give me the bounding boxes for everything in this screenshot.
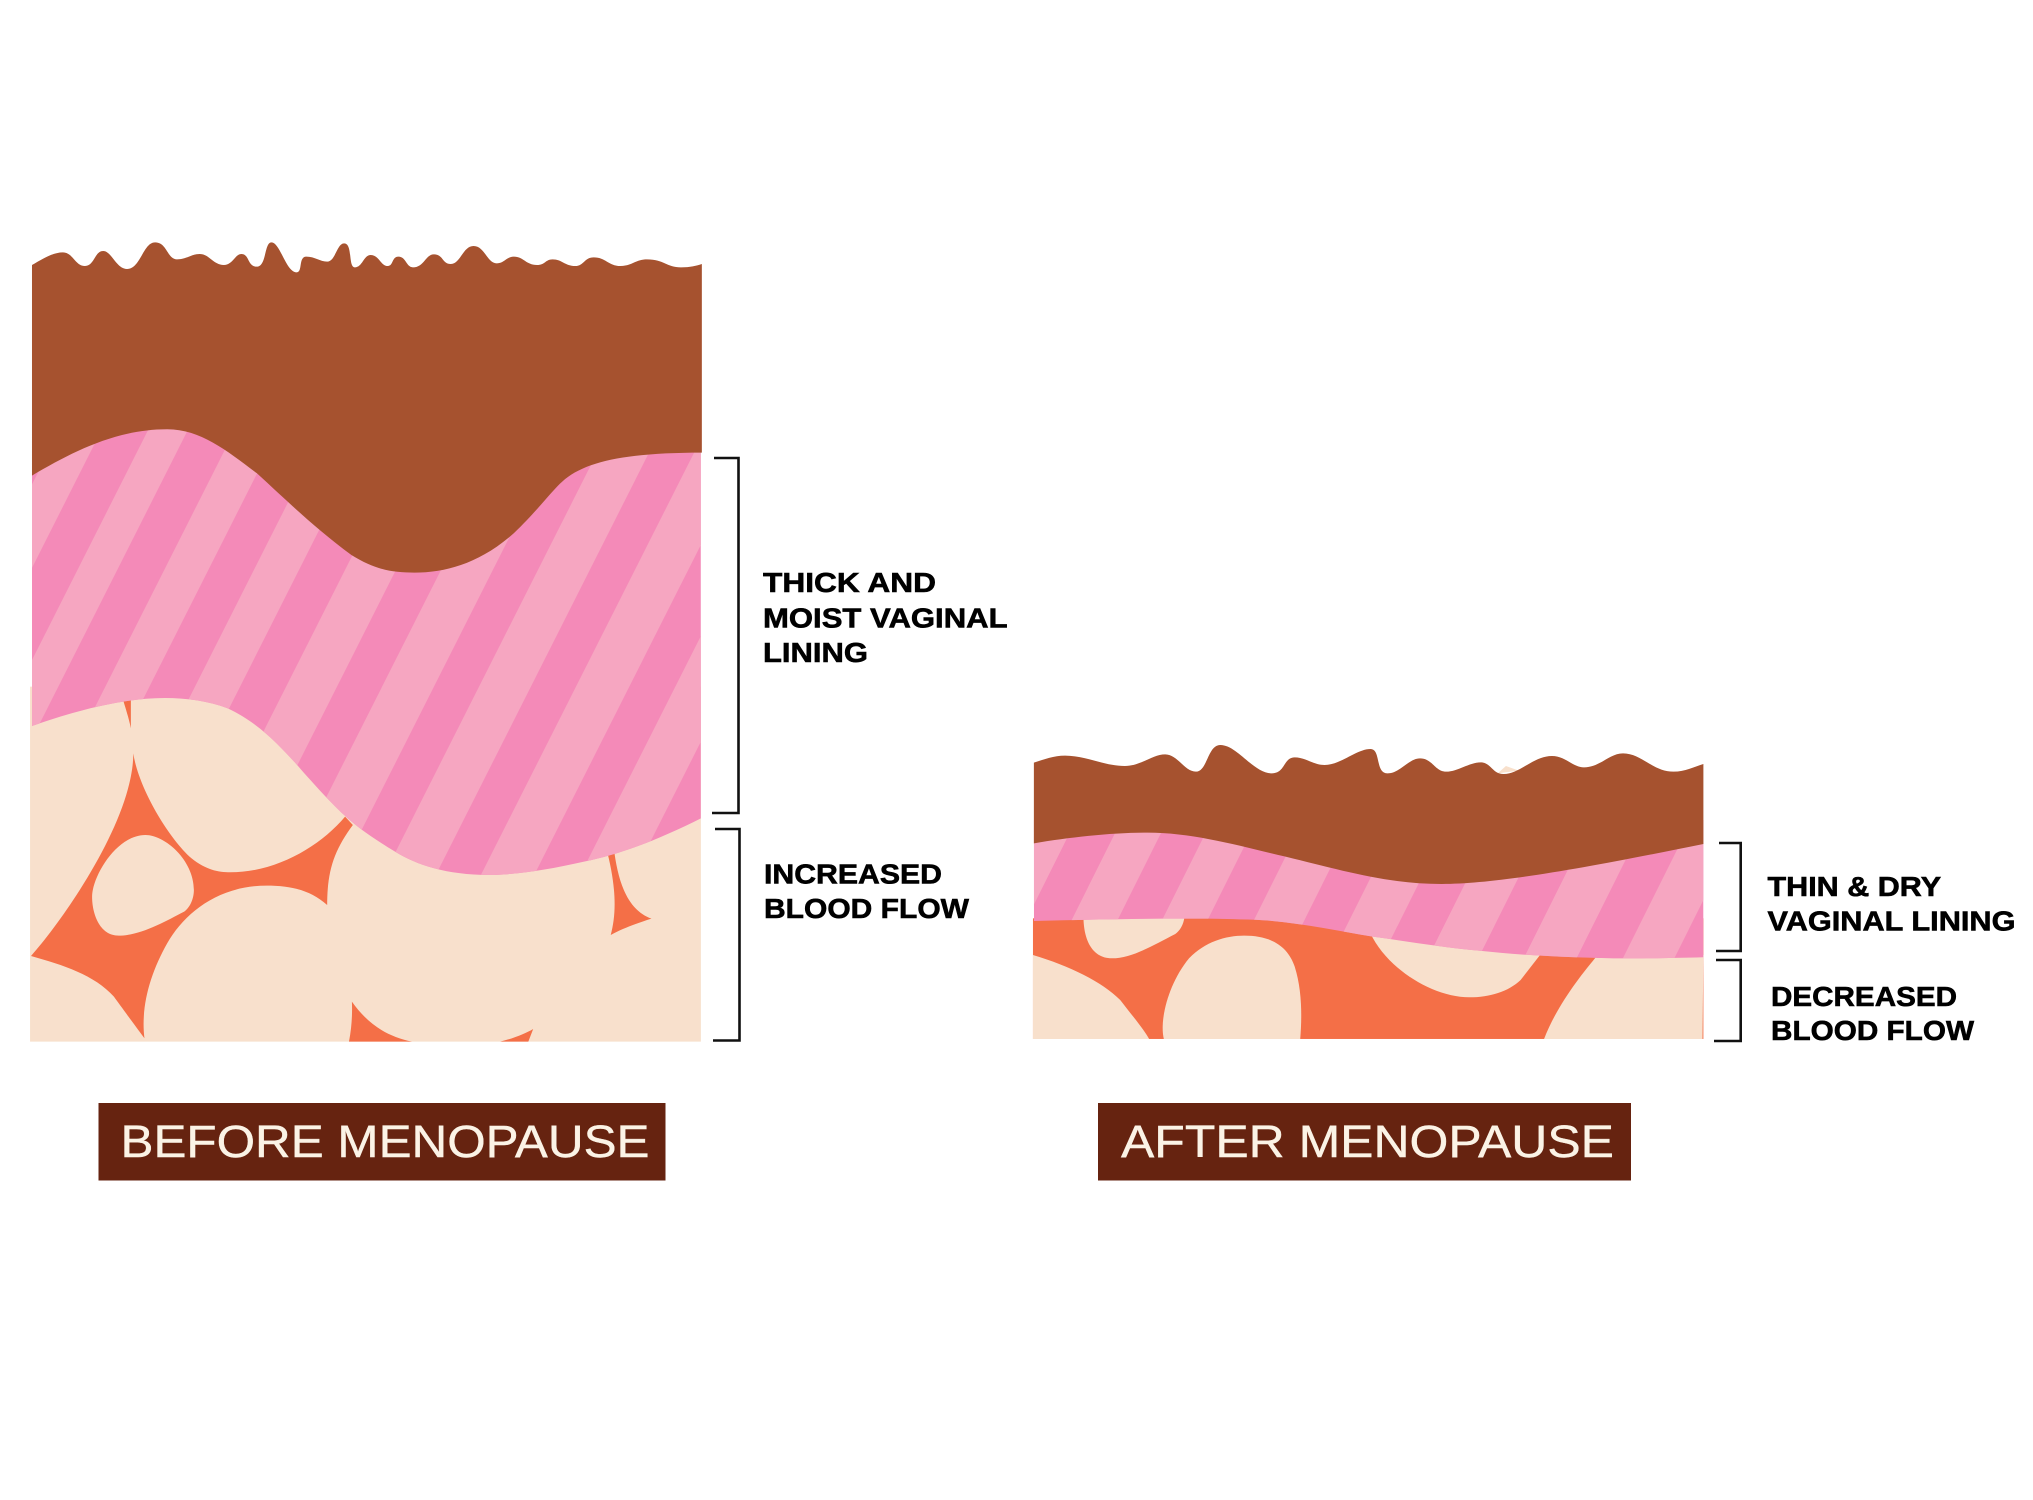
bracket: increased blood flow [713,829,740,1040]
panel: before menopause tissue cross-section [30,242,702,1042]
bracket: decreased blood flow [1714,960,1741,1041]
connective tissue layer with blood vessels [1033,917,1703,1039]
heading: before menopause: BEFORE MENOPAUSE [120,1116,650,1167]
label: increased blood flow: BLOOD FLOW [764,893,969,924]
label: thick and moist vaginal lining: LINING [763,637,868,668]
label: thin and dry vaginal lining: VAGINAL LINING [1768,906,2016,936]
heading: after menopause [1098,1103,1631,1180]
bracket: thin lining [1716,843,1741,951]
striped pink vaginal lining layer [32,429,701,875]
striped pink vaginal lining layer [1034,820,1704,958]
label: thin and dry vaginal lining: THIN & DRY [1768,871,1941,902]
label: increased blood flow: INCREASED [764,858,942,890]
label: decreased blood flow: BLOOD FLOW [1771,1015,1974,1046]
brown epithelium surface layer [32,242,702,573]
brown epithelium surface layer [1034,745,1703,884]
bracket: thick lining [712,458,738,813]
heading: before menopause [98,1103,666,1180]
connective tissue layer with blood vessels [30,687,701,1042]
label: thick and moist vaginal lining: THICK AND [763,567,936,598]
heading: after menopause: AFTER MENOPAUSE [1121,1116,1614,1167]
label: thick and moist vaginal lining: MOIST VAGINAL [763,602,1007,634]
panel: after menopause tissue cross-section [1032,745,1704,1039]
label: decreased blood flow: DECREASED [1771,981,1957,1012]
